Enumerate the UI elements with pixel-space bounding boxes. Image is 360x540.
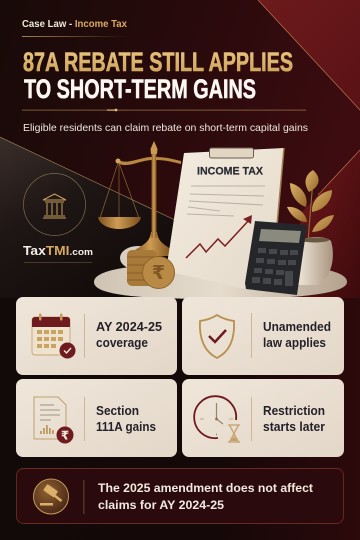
- card: AY coverage: [16, 297, 177, 375]
- plant: [287, 170, 334, 285]
- title divider: [22, 109, 306, 111]
- brand name: TaxTMI.com: [23, 243, 93, 258]
- card text: AY 2024-25: [96, 320, 162, 334]
- logo: TaxTMI emblem: [23, 174, 93, 263]
- card: section 111A: [16, 379, 177, 457]
- card: unamended law: [182, 297, 344, 375]
- icon: gavel: [34, 479, 68, 514]
- trend arrow: [186, 215, 252, 258]
- title: TO SHORT-TERM GAINS: [24, 74, 256, 104]
- callout text: The 2025 amendment does not affect: [98, 481, 313, 495]
- icon: document with rupee: ₹: [61, 428, 69, 442]
- card text: 111A gains: [96, 420, 156, 434]
- rupee coin: ₹: [152, 262, 165, 284]
- card text: law applies: [263, 336, 326, 350]
- card text: Unamended: [263, 320, 331, 334]
- table: [94, 263, 347, 299]
- card text: Restriction: [263, 404, 325, 418]
- card text: coverage: [96, 336, 148, 350]
- card: restriction starts later: [182, 379, 344, 457]
- clipboard: [166, 148, 284, 289]
- icon: document with rupee: [34, 397, 74, 444]
- icon: calendar: [32, 314, 76, 358]
- callout: amendment note: [16, 468, 344, 524]
- card text: Section: [96, 404, 139, 418]
- card text: starts later: [263, 420, 325, 434]
- calculator: [245, 221, 307, 295]
- eyebrow: case law label: Case Law - Income Tax: [22, 19, 127, 30]
- icon: shield: [200, 315, 234, 358]
- coins: [127, 250, 174, 288]
- eyebrow: case law label: [22, 19, 128, 37]
- callout text: claims for AY 2024-25: [98, 498, 224, 512]
- icon: court building in circle: [24, 174, 86, 236]
- scale: [98, 141, 181, 270]
- pot: [298, 237, 333, 285]
- subtitle: Eligible residents can claim rebate on short-term capital gains: [23, 123, 308, 134]
- document heading: INCOME TAX: [197, 166, 264, 178]
- title: [23, 47, 293, 104]
- icon: clock and hourglass: [194, 396, 240, 442]
- illustration: desk scene: [94, 141, 347, 299]
